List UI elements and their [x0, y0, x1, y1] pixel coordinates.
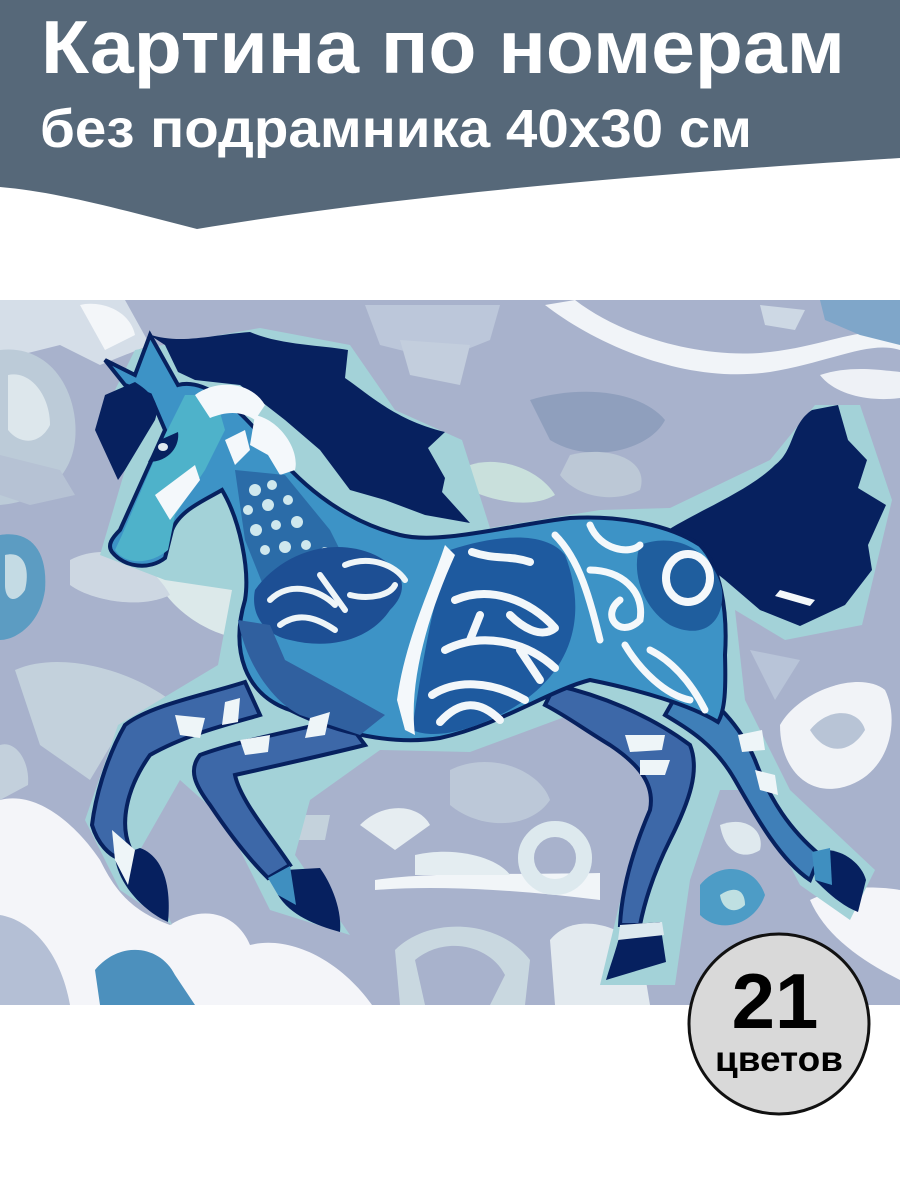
- leg white speckles: [112, 698, 778, 885]
- teal halo around horse: [85, 328, 892, 985]
- eye: [148, 432, 178, 462]
- hind leg far: [665, 680, 820, 880]
- painting: blue patterned horse: [0, 300, 900, 1005]
- painting background sky: [0, 300, 900, 1005]
- shoulder floral pattern: [254, 547, 402, 644]
- rump patch: [637, 541, 722, 631]
- chest dark patch: [238, 620, 385, 735]
- mane: [95, 332, 470, 523]
- head light blue patch: [115, 395, 225, 561]
- flank white scrolls: [555, 525, 705, 710]
- white saddle scrolls: [432, 552, 555, 722]
- body: [105, 335, 726, 740]
- white body stripe: [397, 545, 455, 735]
- neck white scroll pattern: [155, 385, 296, 520]
- hind leg near: [545, 685, 694, 925]
- near front hoof: [278, 868, 340, 932]
- dark saddle patch: [412, 538, 575, 734]
- badge label: цветов: [715, 1040, 843, 1079]
- horse: [92, 332, 886, 980]
- near front leg: [194, 718, 365, 878]
- tail highlight: [775, 590, 815, 606]
- hind hoof near: [606, 922, 666, 980]
- rump ring: [666, 554, 710, 602]
- hind hoof far: [815, 850, 866, 912]
- title: Картина по номерам: [41, 5, 845, 89]
- clouds and swirls: [0, 300, 900, 1005]
- far front leg: [92, 682, 260, 858]
- header banner: [0, 0, 900, 229]
- badge: 21 colours: [689, 934, 869, 1114]
- tail: [668, 405, 886, 626]
- neck spots: [235, 470, 338, 582]
- badge number: 21: [732, 957, 818, 1045]
- hoof band near hind: [618, 922, 664, 940]
- subtitle: без подрамника 40х30 см: [40, 99, 752, 159]
- far front hoof: [115, 848, 169, 922]
